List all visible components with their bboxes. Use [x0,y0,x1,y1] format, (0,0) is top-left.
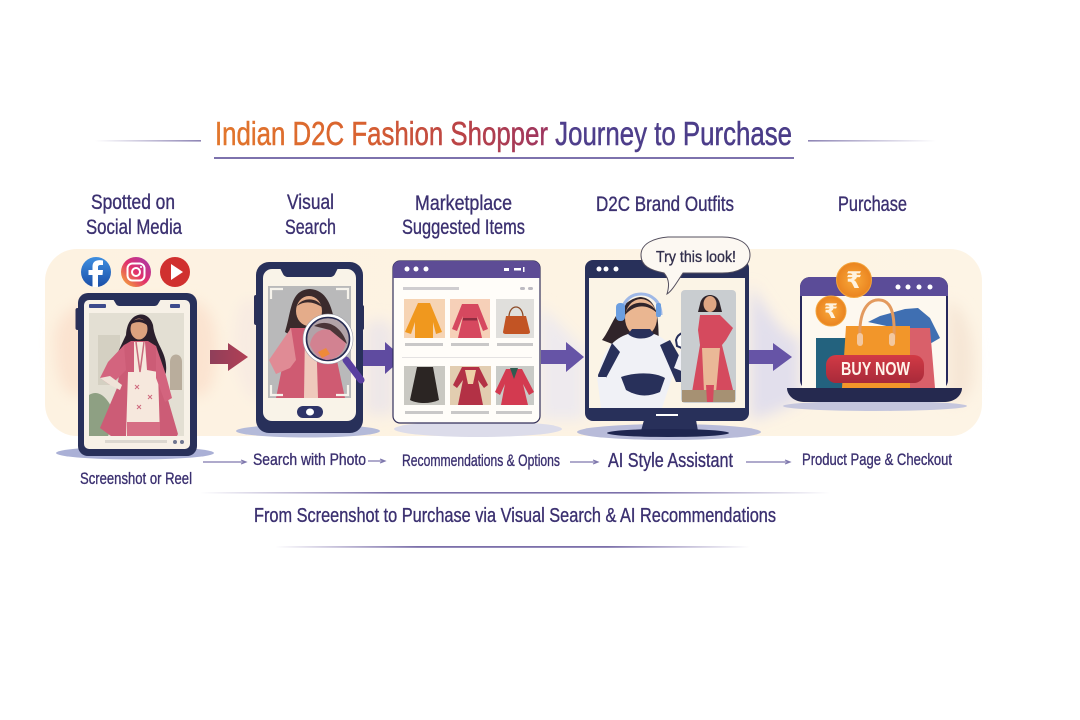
title: Indian D2C Fashion Shopper Journey to Purchase [215,115,792,152]
photo: woman in pink kurta [89,313,184,436]
coin: rupee large [836,262,872,298]
shopping bags [816,300,940,388]
bottom step labels: Search with Photo [253,450,366,469]
robot assistant [597,294,692,408]
browser: marketplace suggestions [393,261,562,437]
small connector arrows [203,459,790,464]
social media icons [81,257,190,287]
footer tagline: From Screenshot to Purchase via Visual Search & AI Recommendations [254,505,776,527]
background band [45,249,982,436]
coin: rupee small [816,296,846,326]
coin: rupee small: ₹ [824,299,838,323]
product: maroon dress [450,366,491,405]
step headings: Suggested Items [402,216,525,239]
laptop: purchase [783,262,967,411]
step headings: Visual [287,191,334,214]
photo with scan frame [268,286,351,398]
device: visual search phone [236,262,380,438]
step headings: Marketplace [415,192,512,215]
arrow 4 [748,343,792,371]
product: orange jacket [404,299,445,338]
step headings: D2C Brand Outfits [596,193,734,216]
bottom step labels: Recommendations & Options [402,451,560,470]
product: black skirt [404,366,445,405]
buy now button: BUY NOW [841,359,910,379]
step headings: Purchase [838,193,907,216]
product: red dress [450,299,490,338]
step headings [86,191,907,239]
monitor: AI style assistant [577,260,761,440]
speech bubble: Try this look! [656,249,736,266]
device: screenshot phone [56,293,214,460]
product: floral dress [495,366,534,405]
bottom step labels: Product Page & Checkout [802,450,952,469]
arrow 1 [210,343,248,371]
buy now button [826,355,924,383]
bottom step labels [80,450,952,488]
outfit photo card [681,290,736,403]
step headings: Social Media [86,216,182,239]
arrow 2 [363,342,403,374]
icon: magnifying glass [303,314,361,380]
step headings: Search [285,216,336,239]
bottom step labels: AI Style Assistant [608,450,733,472]
speech bubble [641,237,750,294]
product: handbag [496,299,534,338]
coin: rupee large: ₹ [846,268,862,294]
bottom step labels: Screenshot or Reel [80,469,192,488]
step headings: Spotted on [91,191,175,214]
arrow 3 [541,342,584,372]
